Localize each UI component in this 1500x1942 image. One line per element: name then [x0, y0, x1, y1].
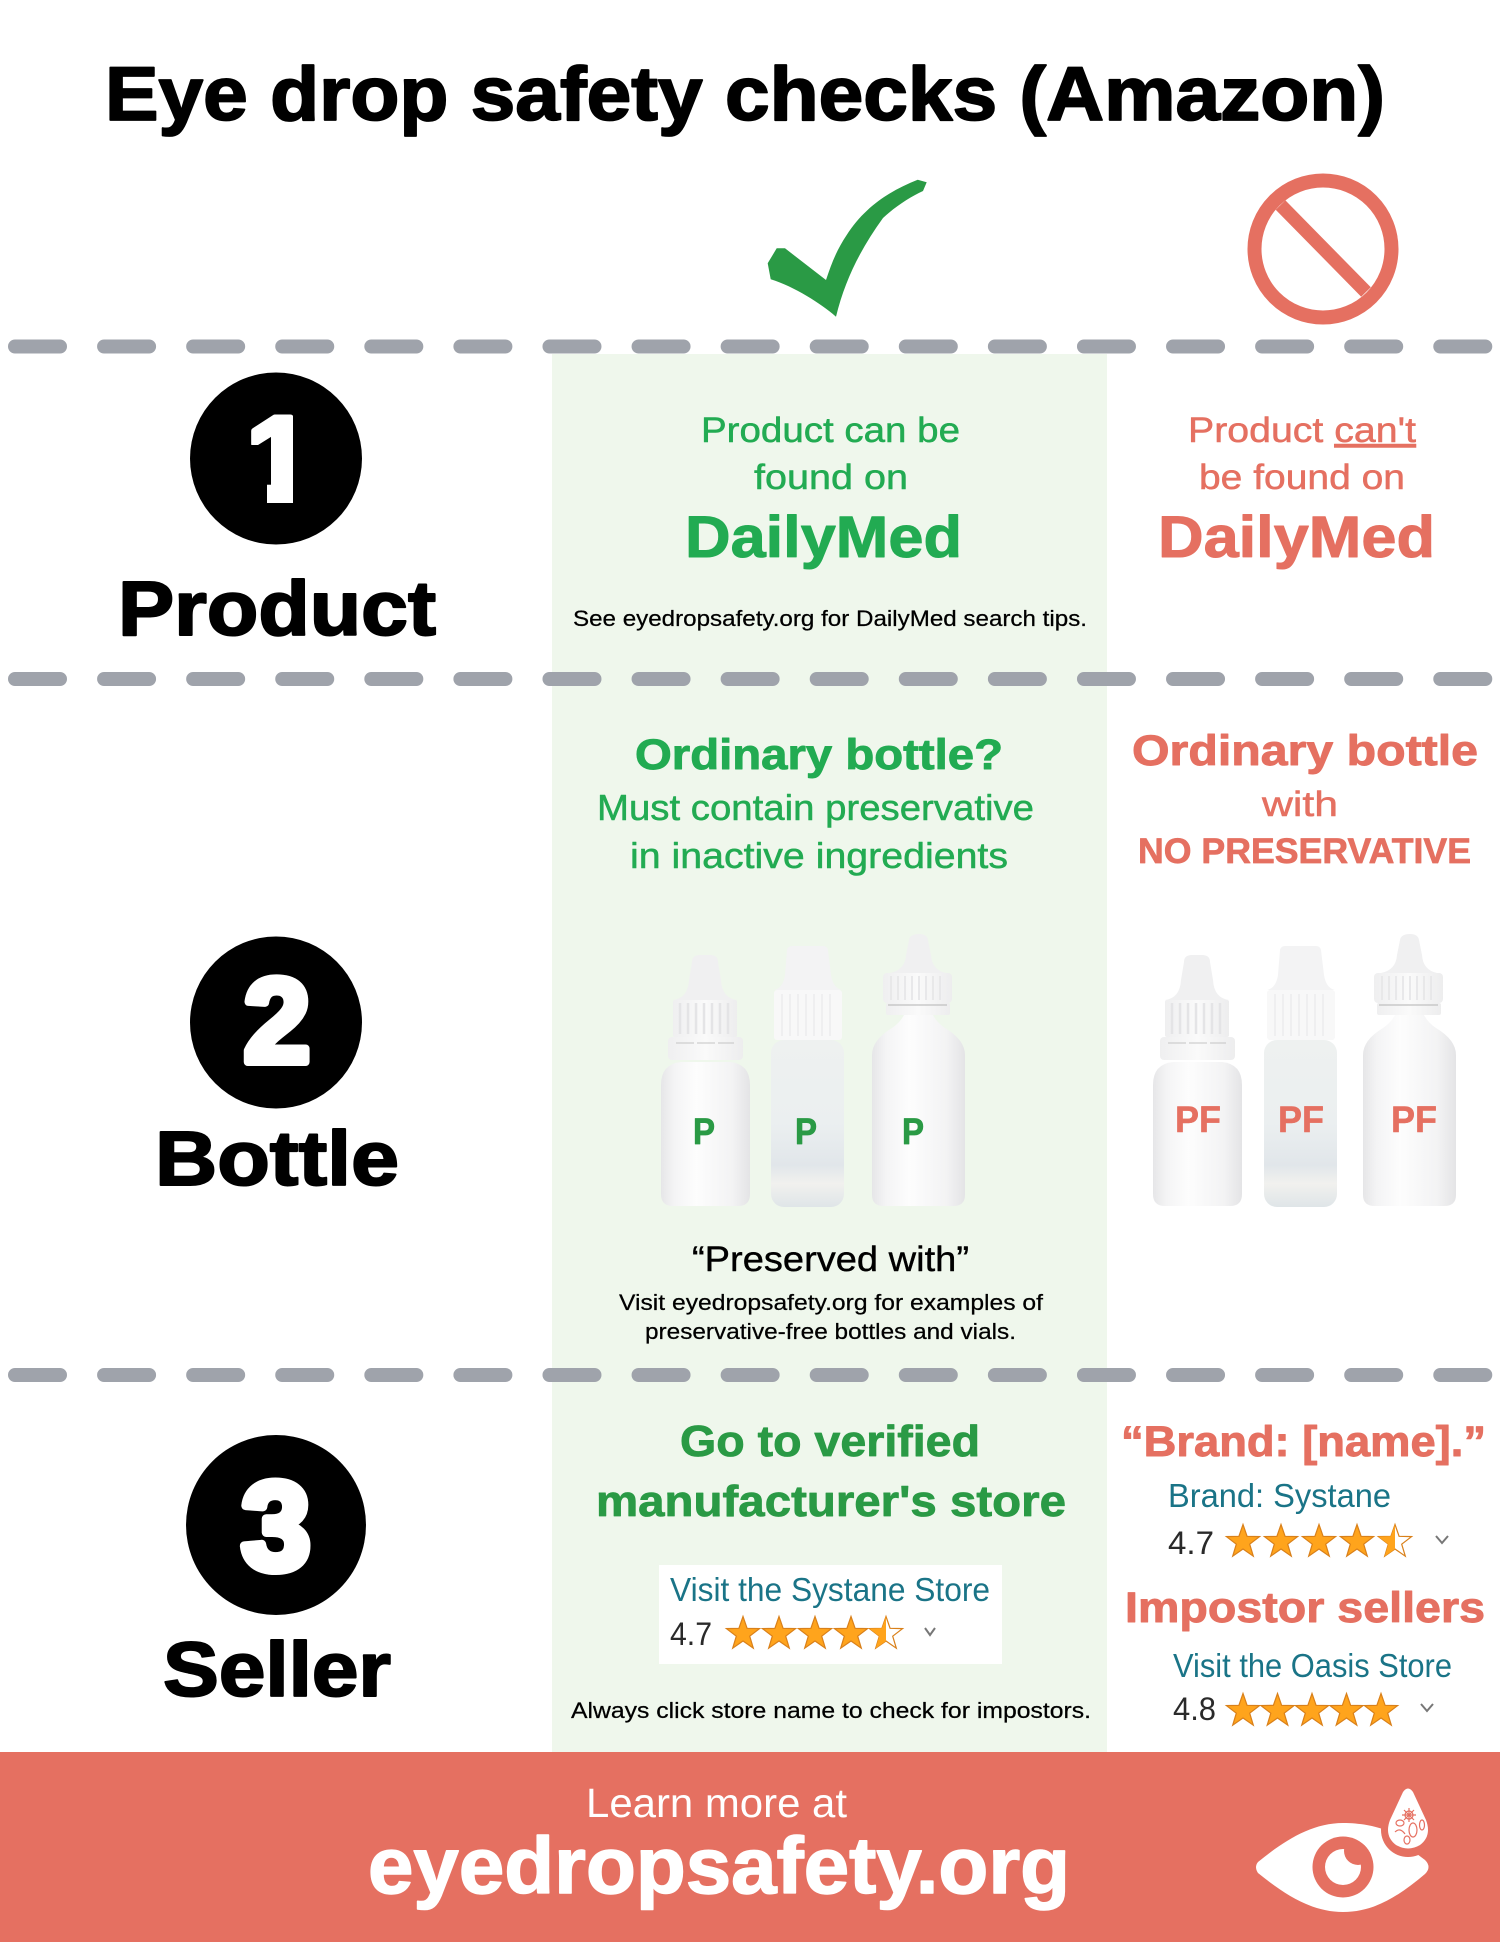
panel: step 3 safe heading: Go to verified — [680, 1417, 980, 1466]
bottle illustration: preserved dropper 2 — [771, 946, 844, 1207]
card: Systane store listing: Visit the Systane Store — [670, 1571, 990, 1608]
bottle illustration: preserved dropper 3: P — [902, 1111, 924, 1152]
panel: step 2 unsafe heading: NO PRESERVATIVE — [1138, 832, 1471, 871]
panel: step 1 safe text: DailyMed — [685, 505, 962, 570]
step 2 label: bottle: 2 — [244, 954, 310, 1088]
panel: brand name warning: “Brand: [name].” — [1121, 1418, 1486, 1466]
panel: step 3 safe heading — [596, 1417, 1066, 1526]
panel: brand name warning: 4.7 — [1168, 1525, 1214, 1561]
panel: step 1 safe text: found on — [754, 458, 908, 497]
divider: third dashed line — [15, 1368, 1490, 1382]
icon: eye with contaminated drop — [1256, 1788, 1435, 1912]
bottle illustration: preserved dropper 2: P — [795, 1111, 817, 1152]
card: Systane store listing — [659, 1565, 1002, 1664]
step 1 label: product: Product — [118, 566, 436, 652]
text block: preserved with note: “Preserved with” — [692, 1240, 969, 1279]
bottle illustration: preservative-free dropper 1: PF — [1175, 1099, 1221, 1140]
text block: preserved with note — [619, 1240, 1044, 1344]
panel: step 1 safe text: Product can be — [701, 411, 960, 450]
icon: red prohibition sign — [1254, 180, 1392, 318]
panel: impostor sellers warning: 4.8 — [1173, 1691, 1216, 1727]
bottle illustration: preservative-free dropper 2 — [1264, 946, 1337, 1207]
step 2 label: bottle — [155, 936, 399, 1202]
text block: preserved with note: preservative-free bottles and vials. — [645, 1319, 1016, 1344]
footer banner: eyedropsafety.org — [368, 1821, 1070, 1910]
divider: second dashed line — [15, 672, 1490, 686]
footer banner — [0, 1752, 1500, 1942]
bottle illustration: preserved dropper 1 — [661, 955, 750, 1206]
text block: preserved with note: Visit eyedropsafety.org for examples of — [619, 1290, 1044, 1315]
divider: top dashed line — [15, 340, 1490, 354]
panel: step 2 safe heading: in inactive ingredients — [630, 835, 1008, 876]
panel: step 1 unsafe text — [1158, 411, 1435, 570]
bottle illustration: preservative-free dropper 3 — [1363, 934, 1456, 1206]
icon: green check mark — [768, 180, 927, 317]
panel: step 1 safe text: See eyedropsafety.org for DailyMed search tips. — [573, 606, 1087, 631]
panel: step 2 unsafe heading: with — [1261, 785, 1338, 824]
panel: step 3 safe heading: manufacturer's store — [596, 1477, 1066, 1526]
panel: step 1 unsafe text: be found on — [1199, 458, 1405, 497]
bottle illustration: preserved dropper 3 — [872, 934, 965, 1206]
panel: impostor sellers warning — [1125, 1584, 1485, 1727]
panel: brand name warning — [1121, 1418, 1486, 1561]
bottle illustration: preserved dropper 1: P — [693, 1111, 715, 1152]
text block: store name advice: Always click store name to check for impostors. — [571, 1698, 1091, 1723]
panel: safe column background — [552, 354, 1107, 1752]
panel: impostor sellers warning: Visit the Oasis Store — [1173, 1647, 1452, 1684]
bottle illustration: preservative-free dropper 2: PF — [1278, 1099, 1324, 1140]
bottle illustration: preservative-free dropper 3: PF — [1391, 1099, 1437, 1140]
step 2 label: bottle: Bottle — [155, 1116, 399, 1202]
step 3 label: seller: Seller — [163, 1627, 391, 1713]
panel: step 2 unsafe heading: Ordinary bottle — [1132, 727, 1478, 775]
title: Eye drop safety checks (Amazon) — [105, 52, 1385, 137]
panel: brand name warning: Brand: Systane — [1168, 1477, 1391, 1514]
step 3 label: seller: 3 — [242, 1458, 310, 1596]
bottle illustration: preservative-free dropper 1 — [1153, 955, 1242, 1206]
panel: step 2 unsafe heading — [1132, 727, 1478, 871]
footer banner: Learn more at — [586, 1780, 848, 1826]
card: Systane store listing: 4.7 — [670, 1616, 712, 1652]
step 1 label: product: 1 — [246, 392, 313, 526]
panel: step 1 unsafe text: DailyMed — [1158, 505, 1435, 570]
panel: step 2 safe heading: Ordinary bottle? — [635, 731, 1003, 779]
panel: step 1 safe text — [573, 411, 1087, 631]
panel: step 2 safe heading: Must contain preservative — [597, 787, 1034, 828]
step 1 label: product — [118, 372, 436, 652]
panel: impostor sellers warning: Impostor sellers — [1125, 1584, 1485, 1632]
panel: step 1 unsafe text: Product can't — [1188, 411, 1416, 450]
panel: step 2 safe heading — [597, 731, 1034, 876]
step 3 label: seller — [163, 1435, 391, 1713]
